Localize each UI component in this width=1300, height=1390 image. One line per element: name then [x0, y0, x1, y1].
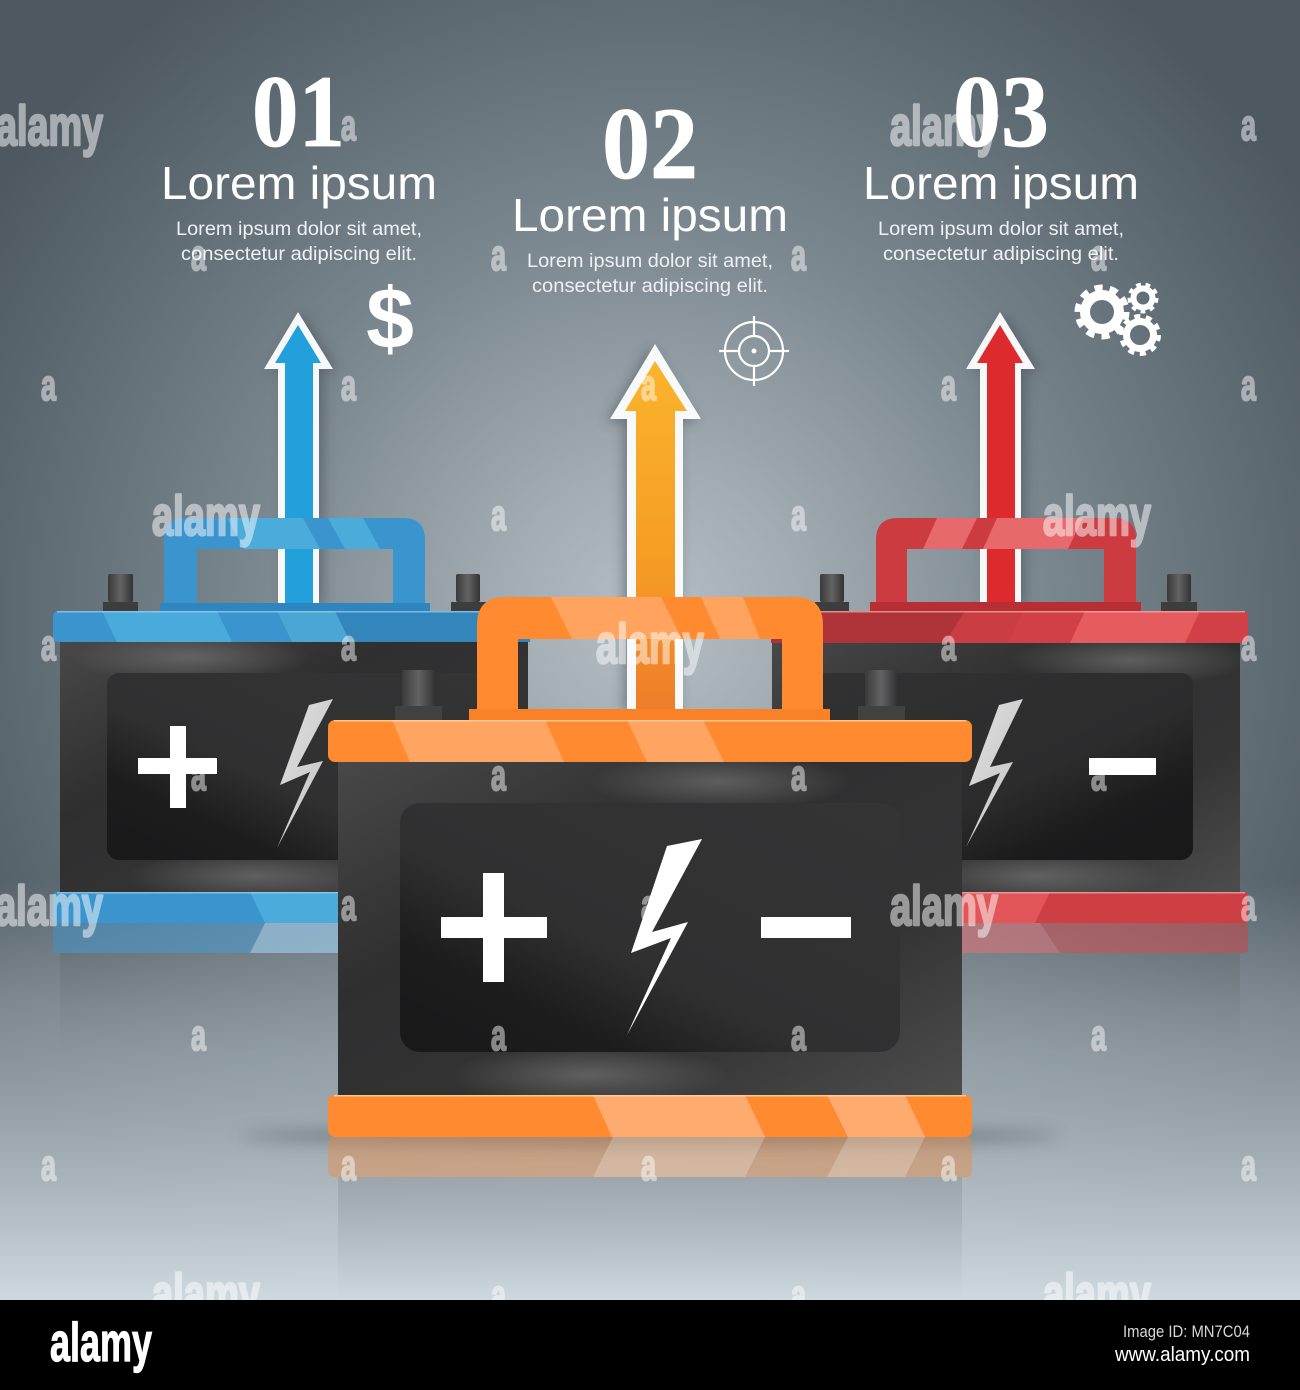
battery: orange [328, 597, 972, 1300]
plus sign [441, 873, 547, 982]
watermarks: a [941, 1141, 956, 1190]
watermarks: a [491, 751, 506, 800]
reflection: red [771, 923, 1248, 1053]
watermarks: a [191, 231, 206, 280]
lid [53, 611, 530, 642]
watermarks: a [1091, 231, 1106, 280]
terminal right [858, 670, 905, 720]
watermarks: a [941, 361, 956, 410]
watermarks: a [341, 881, 356, 930]
watermarks: a [791, 231, 806, 280]
terminal left [103, 574, 138, 611]
minus sign [761, 917, 851, 938]
watermarks: a [491, 491, 506, 540]
body sheen [450, 752, 850, 1105]
ground shadow [240, 1127, 1060, 1145]
text block 03: consectetur adipiscing elit. [883, 244, 1119, 265]
watermarks: a [341, 1141, 356, 1190]
terminal left [395, 670, 442, 720]
watermarks: alamy [890, 94, 998, 157]
watermarks: a [791, 491, 806, 540]
terminal left [815, 574, 849, 611]
watermarks: alamy [0, 94, 103, 157]
body [60, 642, 528, 892]
watermarks: alamy [596, 612, 704, 675]
body [338, 762, 962, 1095]
website: www.alamy.com [1114, 1344, 1250, 1366]
number 01: 01 [252, 55, 345, 169]
lightning bolt [966, 699, 1023, 847]
watermarks: a [1091, 751, 1106, 800]
body [772, 642, 1240, 892]
lightning bolt [627, 839, 702, 1035]
handle [469, 597, 830, 720]
label panel [107, 673, 507, 860]
heading 02: Lorem ipsum [512, 189, 788, 241]
terminal right [451, 574, 487, 611]
arrow: blue [264, 312, 338, 605]
watermarks: a [191, 1011, 206, 1060]
bottom band [771, 892, 1248, 923]
watermarks: a [1241, 621, 1256, 670]
bottom band [53, 892, 530, 923]
label panel [400, 803, 900, 1052]
body sheen [905, 634, 1250, 902]
lid [771, 611, 1248, 643]
watermarks: alamy [152, 1262, 260, 1325]
watermarks: alamy [152, 484, 260, 547]
icon: dollar: $ [366, 271, 414, 367]
watermarks: a [1241, 1141, 1256, 1190]
watermarks: a [191, 751, 206, 800]
battery: blue [53, 518, 530, 1053]
number 02: 02 [602, 87, 698, 201]
number 03: 03 [953, 55, 1049, 169]
watermarks: a [491, 1271, 506, 1320]
icon: target [719, 316, 789, 386]
watermarks: a [1241, 101, 1256, 150]
watermarks: alamy [1043, 484, 1151, 547]
terminal right [1161, 574, 1197, 611]
watermarks: a [941, 621, 956, 670]
battery: red [771, 518, 1250, 1053]
bottom band [328, 1095, 972, 1137]
text block 01 [176, 219, 422, 265]
text block 02: Lorem ipsum dolor sit amet, [527, 251, 773, 272]
watermarks: a [641, 1141, 656, 1190]
watermarks: a [1091, 1011, 1106, 1060]
watermarks: a [341, 361, 356, 410]
plus sign [138, 726, 217, 808]
text block 03 [878, 219, 1124, 265]
arrow: orange [606, 344, 701, 712]
reflection: orange [328, 1137, 972, 1300]
text block 02: consectetur adipiscing elit. [532, 276, 768, 297]
text block 01: consectetur adipiscing elit. [181, 244, 417, 265]
watermarks: alamy [1043, 1262, 1151, 1325]
watermarks: a [1241, 881, 1256, 930]
heading 03: Lorem ipsum [863, 157, 1139, 209]
body sheen [70, 631, 385, 902]
minus sign [1089, 758, 1156, 775]
watermarks: a [641, 361, 656, 410]
watermarks: a [41, 1141, 56, 1190]
text block 01: Lorem ipsum dolor sit amet, [176, 219, 422, 240]
icon: gears [1078, 284, 1158, 354]
watermarks: a [341, 101, 356, 150]
lightning bolt [277, 699, 333, 848]
arrow: red [966, 312, 1040, 605]
handle [160, 518, 430, 611]
watermarks: a [1241, 361, 1256, 410]
watermarks: a [791, 751, 806, 800]
watermarks: a [791, 1011, 806, 1060]
watermarks: a [41, 361, 56, 410]
image id: Image ID: MN7C04 [1123, 1322, 1250, 1341]
reflective floor [0, 880, 1300, 1300]
handle [870, 518, 1141, 611]
watermarks: a [41, 621, 56, 670]
heading 01: Lorem ipsum [161, 157, 437, 209]
watermarks: a [491, 1011, 506, 1060]
watermarks: a [791, 1271, 806, 1320]
label panel [790, 673, 1193, 860]
text block 02 [527, 251, 773, 297]
footer logo: alamy [50, 1311, 152, 1373]
watermarks: a [341, 621, 356, 670]
reflection: blue [53, 923, 530, 1053]
lid [328, 720, 972, 762]
watermarks: a [491, 231, 506, 280]
text block 03: Lorem ipsum dolor sit amet, [878, 219, 1124, 240]
footer bar [0, 1300, 1300, 1390]
watermarks: a [641, 881, 656, 930]
watermarks: alamy [890, 874, 998, 937]
